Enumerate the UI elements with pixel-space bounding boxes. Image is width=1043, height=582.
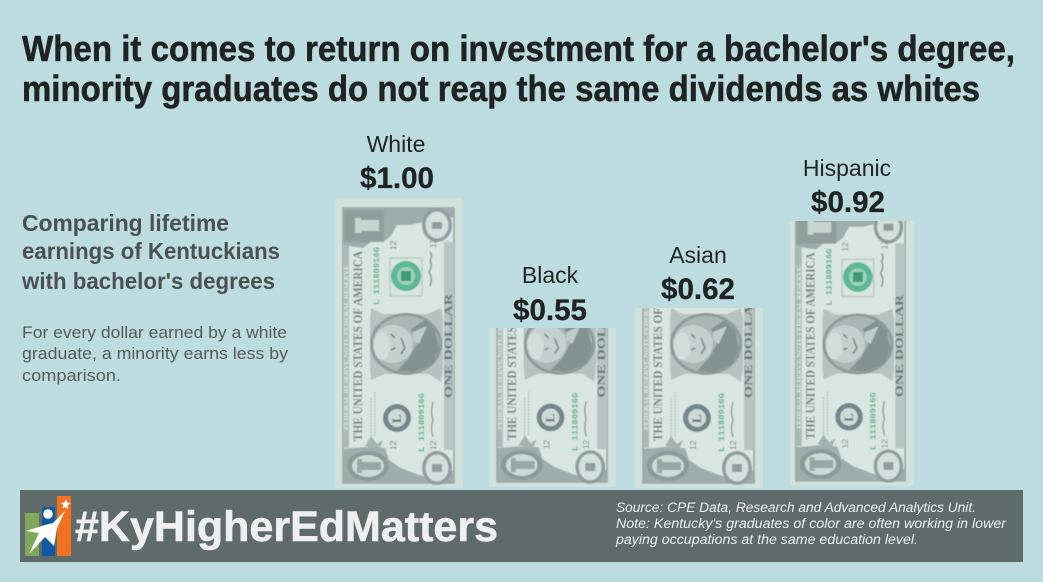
source note [615,500,1007,547]
bar: White $1.00: White [367,131,425,157]
source note: paying occupations at the same education level. [615,532,918,547]
subheading: earnings of Kentuckians [22,238,280,264]
footer band [20,490,1023,562]
description text: For every dollar earned by a white [22,323,287,342]
bar: Black $0.55: Black [522,262,579,288]
bar: Asian $0.62: Asian [669,242,727,268]
hashtag: #KyHigherEdMatters [75,503,498,551]
title: minority graduates do not reap the same dividends as whites [22,68,980,109]
description text [22,323,289,385]
bar: Hispanic $0.92: $0.92 [811,186,885,219]
bar: Black $0.55: $0.55 [513,294,587,327]
bar: Asian $0.62: $0.62 [661,273,735,306]
bar: Hispanic $0.92 [788,155,914,486]
title [22,28,1015,109]
icon: logo with bars and figure [25,496,71,556]
bar: White $1.00: $1.00 [360,162,434,195]
subheading: with bachelor's degrees [21,268,275,294]
description text: comparison. [22,366,121,385]
subheading [21,210,280,294]
bar: Black $0.55 [489,266,616,487]
description text: graduate, a minority earns less by [22,344,289,363]
bar: White $1.00 [335,131,463,488]
bar: Asian $0.62 [635,246,763,488]
bar: Hispanic $0.92: Hispanic [803,155,891,181]
subheading: Comparing lifetime [22,210,229,236]
source note: Source: CPE Data, Research and Advanced Analytics Unit. [616,500,976,515]
source note: Note: Kentucky's graduates of color are often working in lower [616,516,1007,531]
